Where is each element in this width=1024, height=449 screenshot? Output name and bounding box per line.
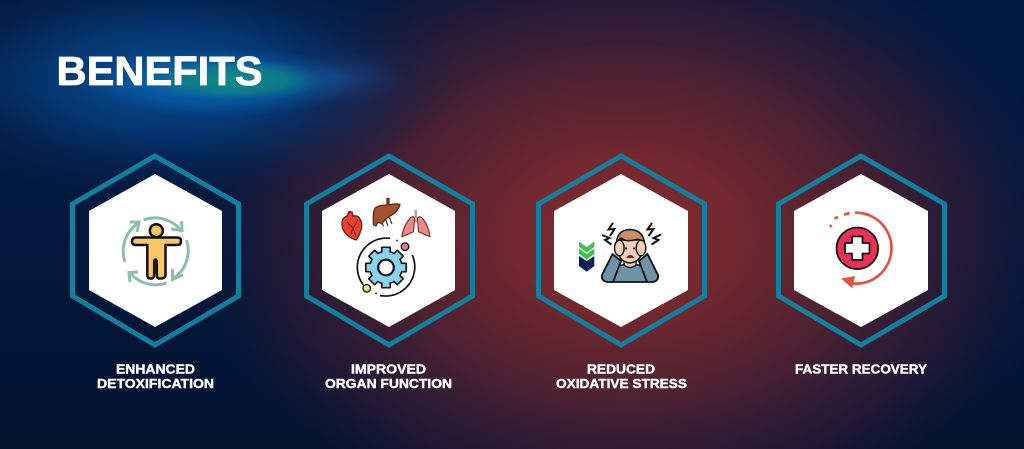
label: reduced oxidative stress: REDUCED [587, 362, 655, 376]
hexagon white centre [794, 174, 928, 327]
hexagon frame [778, 156, 944, 345]
label: improved organ function: ORGAN FUNCTION [325, 376, 452, 391]
panel: enhanced detoxification [72, 156, 238, 345]
label: improved organ function [325, 362, 452, 391]
left arm [602, 254, 621, 282]
panel: faster recovery [778, 156, 944, 345]
hexagon frame [72, 156, 238, 345]
icon: liver [373, 198, 400, 226]
panel: improved organ function [306, 156, 472, 345]
label: reduced oxidative stress: OXIDATIVE STRESS [556, 376, 687, 391]
eyes and mouth [626, 248, 634, 249]
hexagon white centre [554, 174, 688, 327]
hands [614, 240, 624, 256]
right arm [639, 254, 658, 282]
label: enhanced detoxification [97, 362, 214, 391]
label: faster recovery: FASTER RECOVERY [795, 362, 927, 376]
hexagon frame [306, 156, 472, 345]
icon: gear with orbit [357, 238, 415, 296]
label: enhanced detoxification: ENHANCED [116, 362, 195, 376]
panel: reduced oxidative stress [538, 156, 704, 345]
title: BENEFITS [56, 48, 262, 94]
stress bolts [602, 223, 661, 244]
hexagon white centre [322, 174, 455, 327]
label: enhanced detoxification: DETOXIFICATION [97, 376, 214, 391]
icon: heart [342, 212, 362, 240]
hair [616, 230, 644, 243]
icon: down chevrons [579, 242, 594, 272]
hexagon white centre [89, 174, 222, 327]
icon: recovery arrow and medical cross [830, 213, 891, 288]
face [618, 240, 642, 263]
hexagon frame [538, 156, 704, 345]
label: improved organ function: IMPROVED [351, 362, 426, 376]
icon: lungs [402, 210, 430, 237]
label: reduced oxidative stress [556, 362, 687, 391]
neck [624, 258, 636, 268]
icon: body with cycle arrows [123, 218, 188, 285]
torso [611, 264, 649, 282]
icon: stressed person [602, 223, 661, 282]
